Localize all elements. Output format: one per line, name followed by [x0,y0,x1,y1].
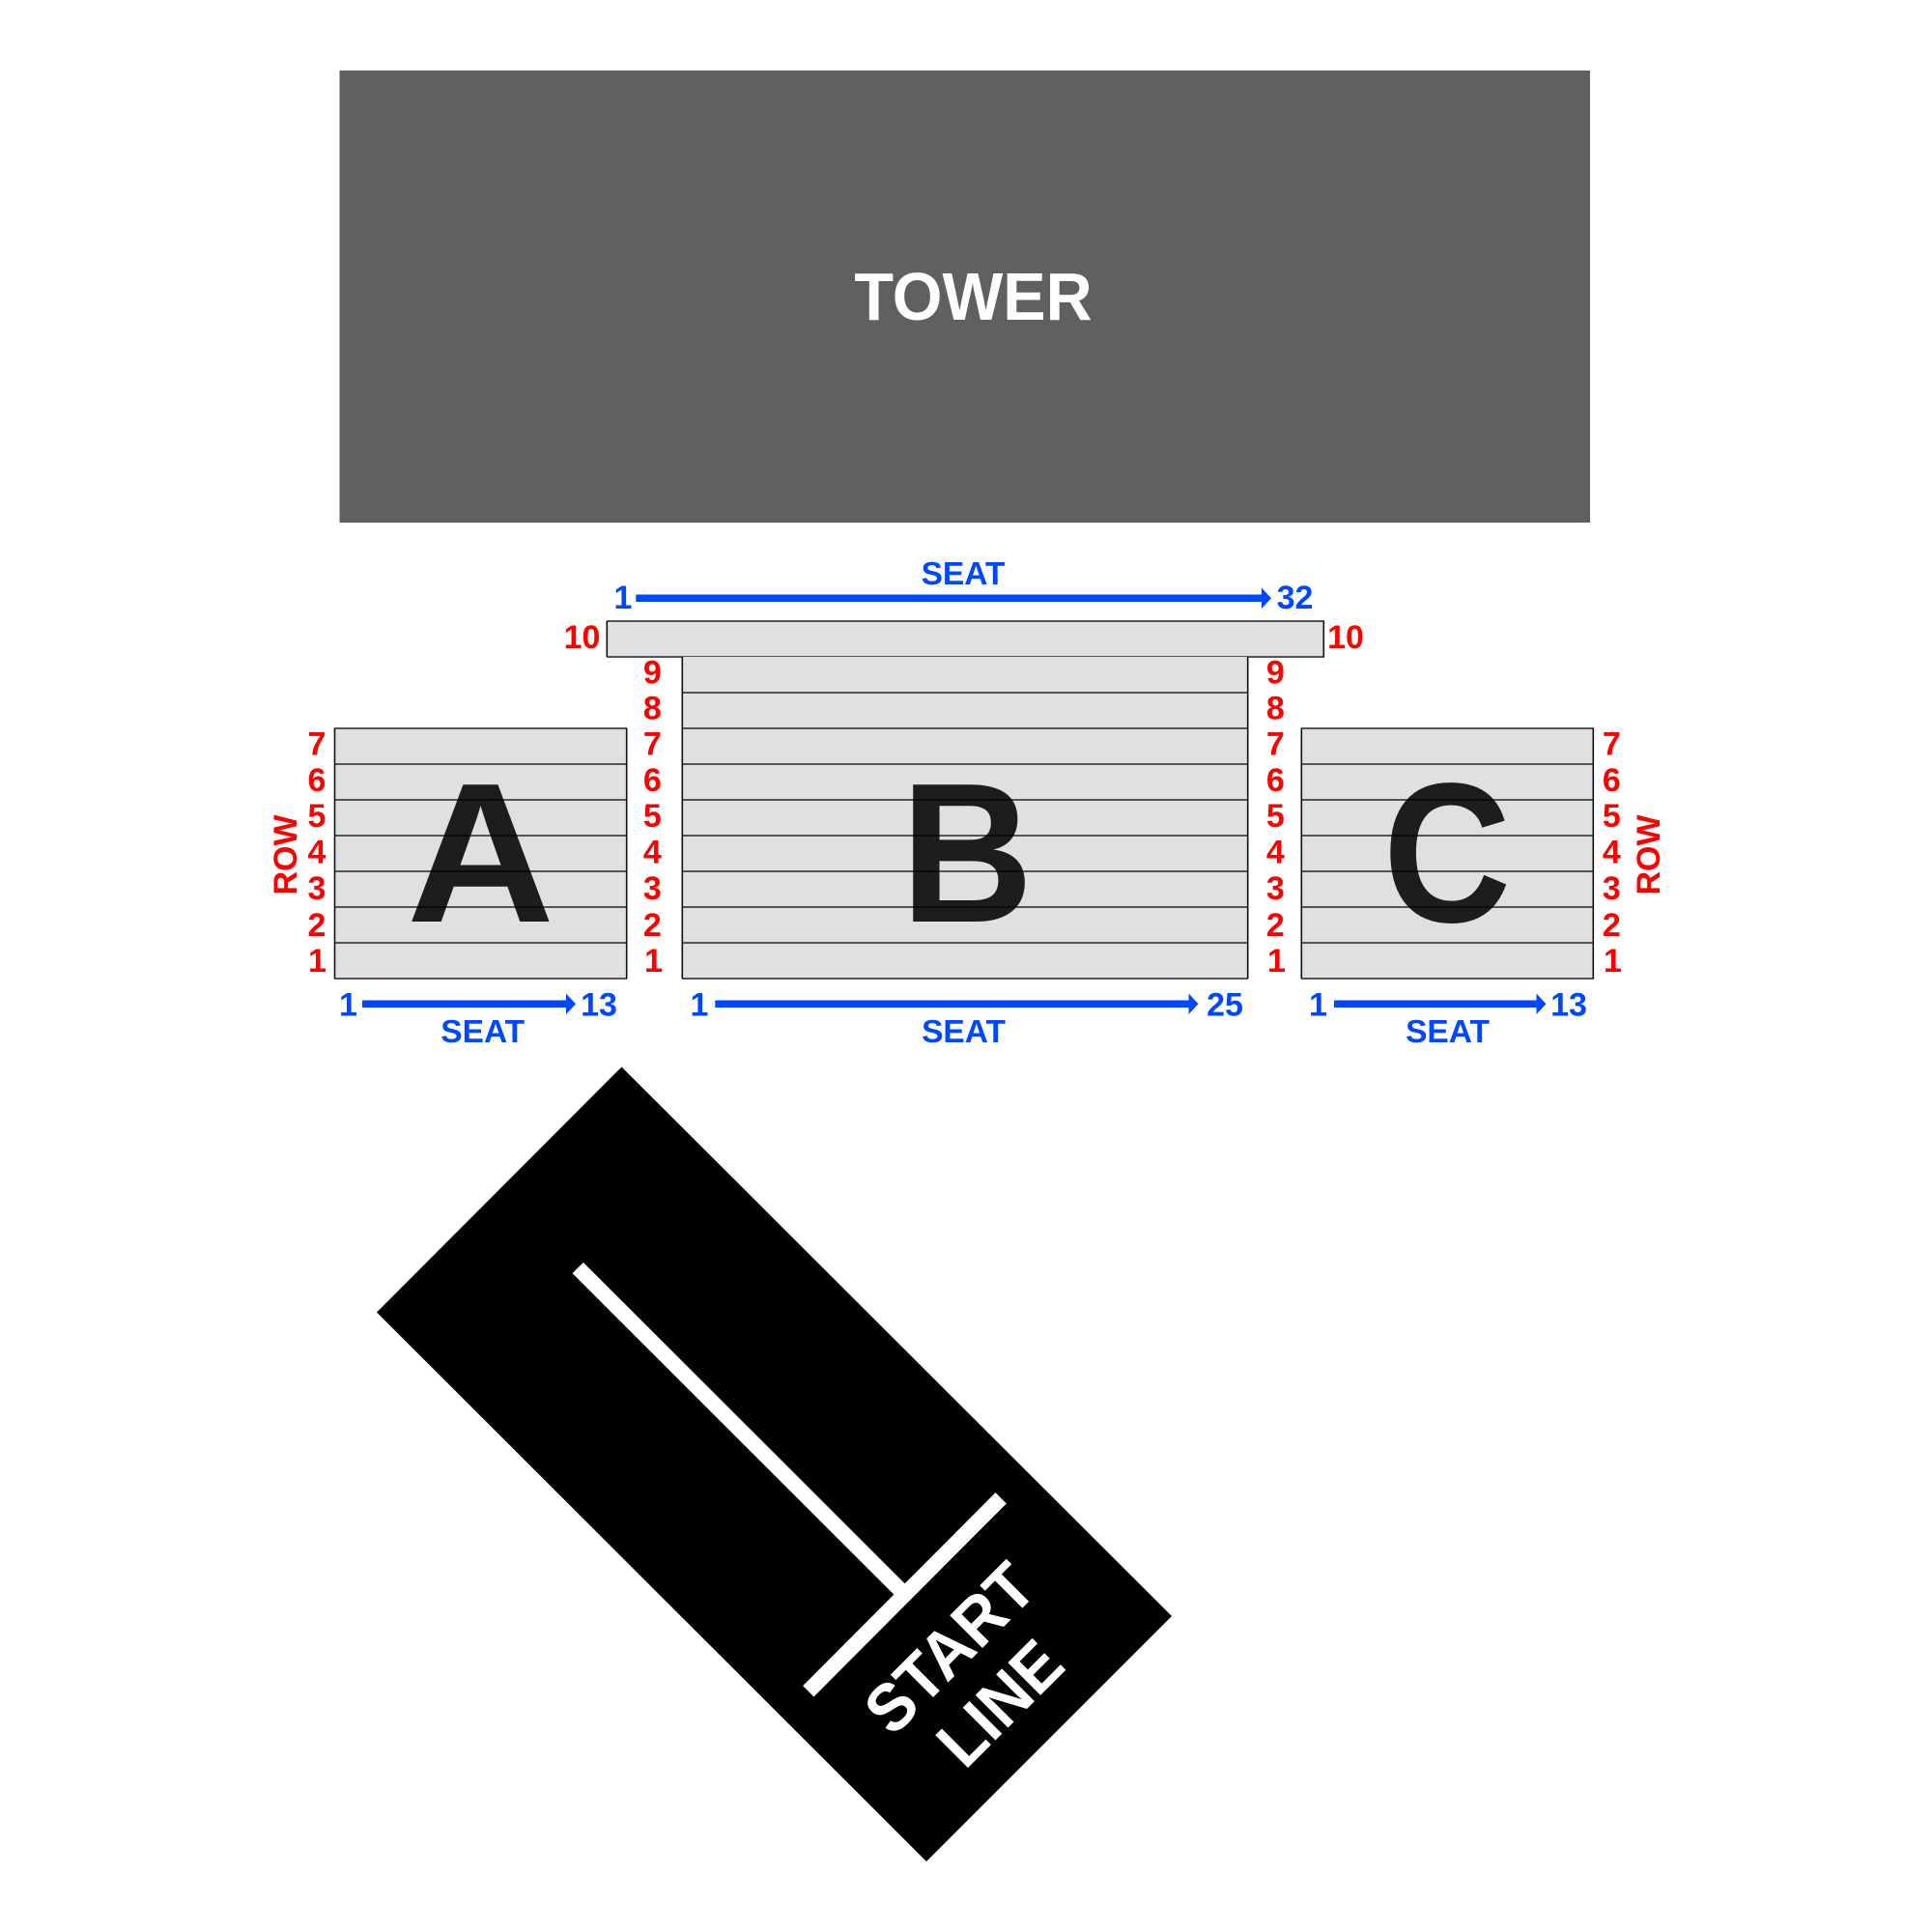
row numbers: right of section C: 2 [1603,907,1621,944]
row numbers: right of section C: 1 [1604,943,1622,980]
row numbers: between sections B and C: 3 [1266,870,1285,907]
row numbers: between sections A and B: 2 [643,907,662,944]
seat axis: section B: 1 [691,987,708,1024]
row numbers: between sections B and C: 4 [1266,835,1285,871]
row numbers: between sections A and B: 10 [564,619,600,656]
label: ROW left: ROW [268,814,304,895]
row numbers: right of section C: 5 [1603,798,1621,835]
panel: tower: TOWER [854,259,1093,334]
row numbers: between sections A and B: 5 [643,798,662,835]
seat axis: section A: 1 [339,987,357,1024]
row numbers: between sections A and B: 7 [643,726,662,763]
white start line [809,1498,1001,1691]
seat axis: section B [691,987,1243,1050]
row numbers: between sections B and C: 2 [1266,907,1285,944]
panel: section C [1301,728,1594,979]
row numbers: between sections B and C [1266,619,1364,980]
panel: tower [340,71,1590,523]
seat axis: section C: 1 [1309,987,1327,1024]
row numbers: between sections B and C: 9 [1266,655,1285,692]
row numbers: right of section C: 4 [1603,835,1621,871]
panel: section C: C [1383,742,1511,964]
white centre line [578,1267,904,1594]
row numbers: left of section A: 6 [308,762,326,799]
row numbers: right of section C: 7 [1603,726,1621,763]
row numbers: between sections A and B: 3 [643,870,662,907]
seat axis: section B: SEAT [922,1014,1006,1050]
seat axis: section A: SEAT [440,1014,526,1050]
row numbers: left of section A: 5 [308,798,326,835]
row numbers: between sections B and C: 10 [1327,619,1364,656]
top seat axis: SEAT [922,556,1006,592]
row numbers: left of section A: 4 [308,835,327,871]
panel: start line track [377,1066,1172,1861]
top seat axis [614,556,1313,616]
row numbers: between sections B and C: 1 [1267,943,1286,980]
row numbers: between sections A and B: 6 [643,762,662,799]
top seat axis: 32 [1277,580,1313,616]
panel: section A [334,728,627,979]
row numbers: left of section A: 2 [308,907,326,944]
seat axis: section C: 13 [1550,987,1587,1024]
seat axis: section A: 13 [581,987,617,1024]
row numbers: left of section A: 1 [308,943,327,980]
label: start line: LINE [923,1626,1078,1781]
panel: row 10 bar across the top of section B [607,621,1324,657]
seat axis: section A [339,987,617,1050]
label: start line: START [851,1549,1050,1748]
row numbers: between sections B and C: 5 [1266,798,1285,835]
row numbers: between sections B and C: 6 [1266,762,1285,799]
row numbers: left of section A: 7 [308,726,326,763]
top seat axis: 1 [614,580,632,616]
panel: section B: B [901,742,1033,964]
seat axis: section C: SEAT [1406,1014,1490,1050]
row numbers: right of section C: 6 [1603,762,1621,799]
row numbers: between sections A and B: 1 [644,943,663,980]
row numbers: right of section C [1603,726,1622,980]
panel: section B [682,657,1248,979]
row numbers: left of section A: 3 [308,870,326,907]
seat axis: section C [1309,987,1587,1050]
row numbers: between sections A and B: 4 [643,835,662,871]
label: ROW right: ROW [1631,814,1667,895]
seat axis: section B: 25 [1207,987,1243,1024]
panel: section A: A [407,743,554,964]
row numbers: between sections A and B: 9 [643,655,662,692]
row numbers: between sections B and C: 7 [1266,726,1285,763]
row numbers: left of section A [308,726,327,980]
row numbers: between sections B and C: 8 [1266,690,1285,726]
row numbers: between sections A and B [564,619,663,980]
row numbers: between sections A and B: 8 [643,690,662,726]
row numbers: right of section C: 3 [1603,870,1621,907]
